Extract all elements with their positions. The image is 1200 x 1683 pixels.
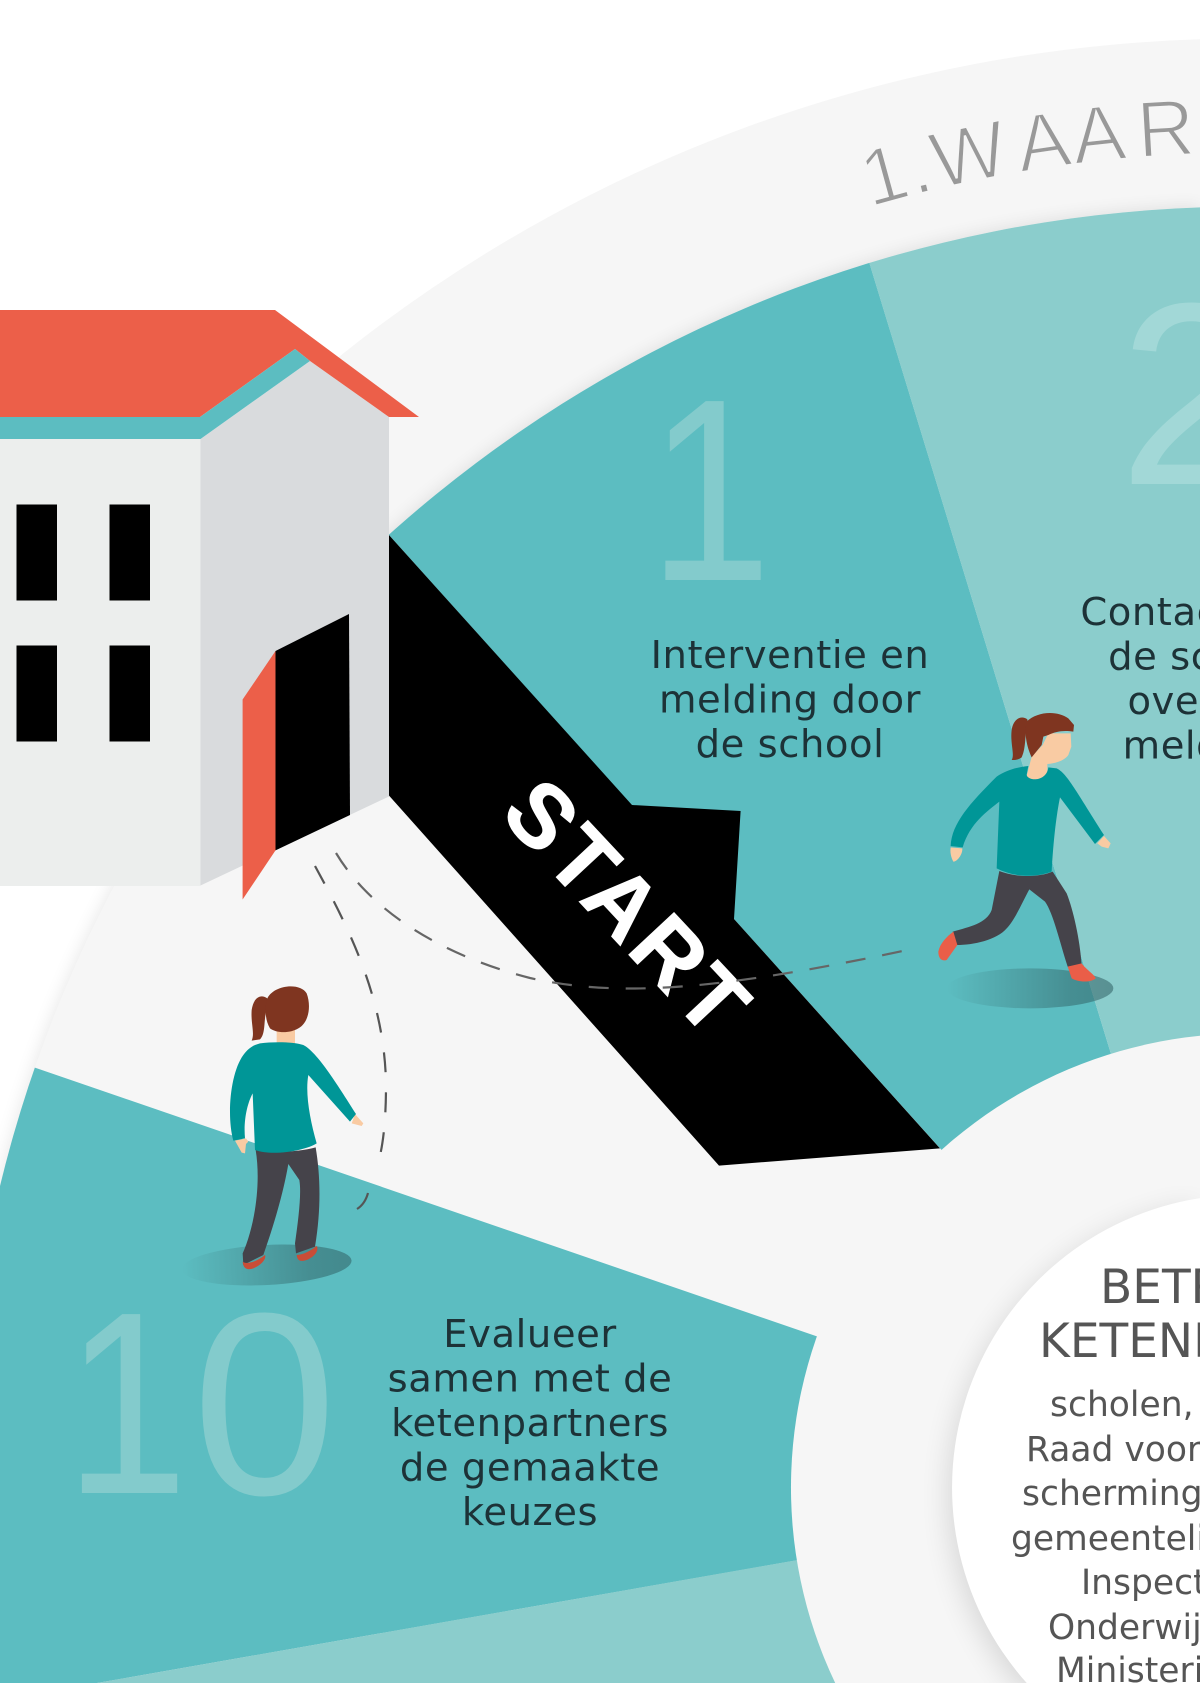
step 1 text: Interventie en bbox=[651, 633, 929, 678]
start arrow bbox=[388, 534, 940, 1166]
side wall bbox=[200, 361, 389, 886]
centre circle: betrokken ketenpartners bbox=[952, 1198, 1200, 1683]
segment 1 bbox=[389, 262, 1111, 1150]
number 10 bbox=[65, 1259, 337, 1550]
hub ring bbox=[791, 1036, 1200, 1683]
roof trim bbox=[0, 349, 310, 439]
standing figure bbox=[181, 986, 363, 1289]
running figure bbox=[938, 713, 1113, 1008]
step 1 text: de school bbox=[696, 722, 884, 767]
dashed route to step 2 bbox=[336, 853, 912, 988]
roof bbox=[0, 310, 419, 417]
step 1 text: melding door bbox=[659, 678, 921, 722]
front wall bbox=[0, 439, 200, 886]
number 1: 1 bbox=[649, 346, 771, 636]
step 10 text: keuzes bbox=[462, 1490, 598, 1535]
dashed route to step 10 bbox=[315, 866, 386, 1209]
step 10 text: de gemaakte bbox=[400, 1446, 660, 1490]
segment 2 bbox=[870, 207, 1200, 1054]
segment 10 bbox=[0, 1068, 817, 1683]
step 10 text: samen met de bbox=[388, 1356, 672, 1402]
doorway bbox=[276, 614, 350, 850]
step 10 text: ketenpartners bbox=[391, 1401, 669, 1446]
segment 9 bbox=[98, 1560, 836, 1683]
number 10: 1 bbox=[65, 1259, 188, 1549]
open door bbox=[243, 651, 276, 900]
school building bbox=[0, 310, 419, 900]
start label: START bbox=[484, 760, 770, 1058]
number 10: 0 bbox=[192, 1260, 337, 1550]
hub shadow bbox=[948, 1206, 1196, 1683]
step 10 text: Evalueer bbox=[443, 1312, 617, 1357]
windows bbox=[16, 504, 150, 742]
